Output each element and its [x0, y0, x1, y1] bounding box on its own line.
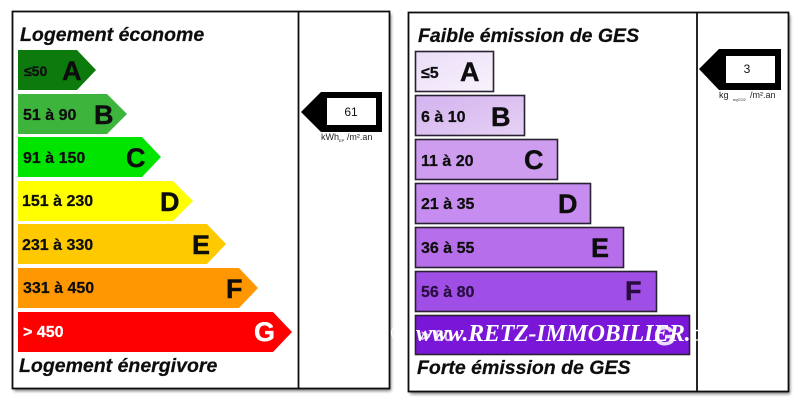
- value marker: 61 kWh: EP: [339, 138, 345, 143]
- heading: faible emission: Faible émission de GES: [418, 25, 639, 47]
- bar: GES class C: C: [524, 145, 544, 175]
- watermark: www.RETZ-IMMOBILIER.c: [416, 321, 701, 347]
- bar: energy class D: D: [160, 187, 180, 217]
- bar: energy class F: F: [226, 274, 242, 304]
- bar: GES class F: [416, 272, 656, 312]
- bar: energy class A: [18, 50, 96, 90]
- heading: logement energivore: Logement énergivore: [19, 355, 217, 377]
- value marker: 3 kg: [699, 49, 781, 102]
- bar: GES class G: > 80: [421, 328, 453, 345]
- bar: energy class B: 51 à 90: [23, 107, 76, 124]
- bar: energy class D: [18, 181, 193, 221]
- bar: energy class C: [18, 137, 161, 177]
- value marker: 61 kWh: kWh: [321, 132, 339, 142]
- bar: energy class C: 91 à 150: [23, 150, 85, 167]
- bar: energy class B: [18, 94, 127, 134]
- bar: GES class D: 21 à 35: [421, 196, 474, 213]
- value marker: 61 kWh: /m².an: [344, 132, 372, 142]
- value marker: 3 kg: /m².an: [750, 90, 776, 100]
- bar: GES class D: D: [558, 189, 578, 219]
- bar: energy class F: [18, 268, 258, 308]
- bar: GES class A: [416, 52, 494, 92]
- bar: energy class E: 231 à 330: [22, 237, 93, 254]
- panel: greenhouse gas emissions: [408, 12, 790, 394]
- value marker: 3 kg: 3: [744, 62, 751, 76]
- bar: energy class A: A: [62, 56, 82, 86]
- bar: GES class G: G: [654, 321, 675, 351]
- bar: energy class D: 151 à 230: [22, 193, 93, 210]
- bar: energy class B: B: [94, 100, 114, 130]
- bar: GES class B: 6 à 10: [421, 109, 466, 126]
- bar: energy class F: 331 à 450: [23, 280, 94, 297]
- bar: energy class G: G: [254, 317, 275, 347]
- value marker: 3 kg: eqCO2: [733, 97, 746, 102]
- bar: GES class A: A: [460, 57, 480, 87]
- bar: GES class B: B: [491, 102, 510, 132]
- bar: GES class D: [416, 184, 590, 224]
- bar: GES class E: E: [591, 233, 609, 263]
- value marker: 61 kWh: 61: [344, 105, 358, 119]
- panel: energy consumption: [12, 12, 391, 391]
- bar: GES class E: 36 à 55: [421, 240, 474, 257]
- heading: forte emission: Forte émission de GES: [417, 357, 630, 379]
- bar: GES class C: [416, 140, 558, 180]
- value marker: 61 kWh: [301, 92, 382, 143]
- bar: energy class G: > 450: [23, 324, 64, 341]
- bar: GES class F: 56 à 80: [421, 284, 474, 301]
- bar: energy class E: E: [192, 230, 210, 260]
- bar: GES class F: F: [625, 276, 642, 306]
- watermark: ©: [390, 321, 408, 347]
- watermark: [391, 325, 698, 341]
- bar: energy class C: C: [126, 143, 146, 173]
- heading: logement econome: Logement économe: [20, 24, 204, 46]
- bar: GES class B: [416, 96, 524, 136]
- bar: GES class A: ≤5: [421, 65, 439, 82]
- bar: energy class E: [18, 224, 226, 264]
- bar: GES class E: [416, 228, 624, 268]
- value marker: 3 kg: kg: [719, 90, 729, 100]
- bar: energy class G: [18, 312, 292, 352]
- bar: energy class A: ≤50: [24, 63, 47, 79]
- bar: GES class G: [416, 316, 690, 354]
- bar: GES class C: 11 à 20: [421, 153, 474, 170]
